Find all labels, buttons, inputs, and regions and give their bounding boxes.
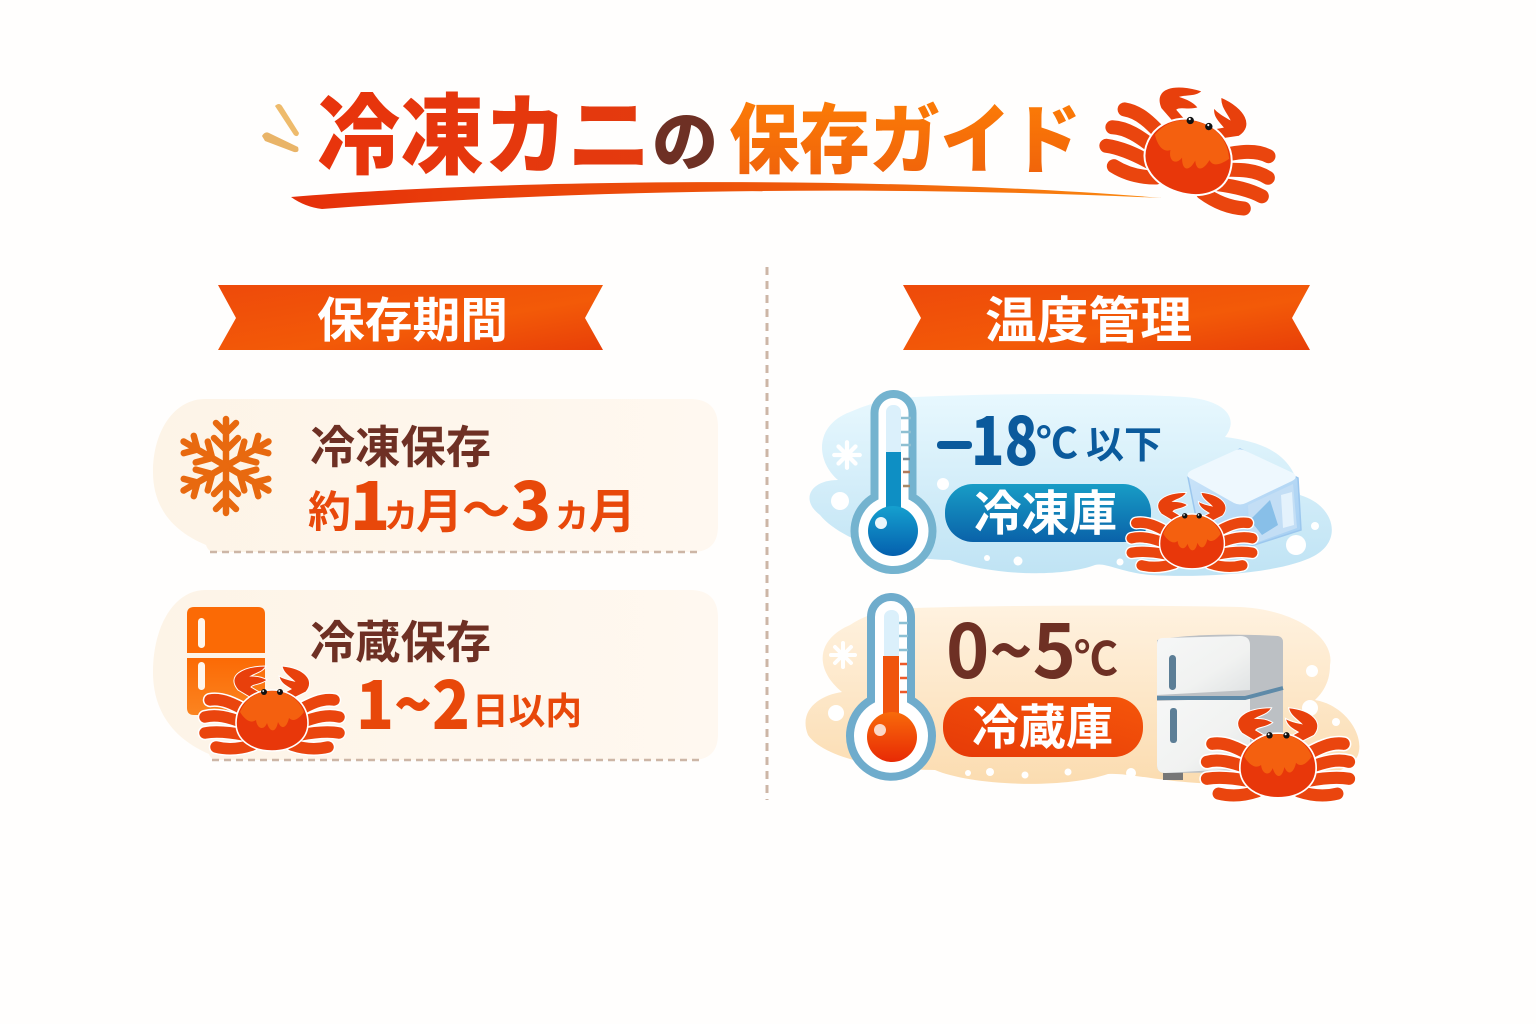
icon: refrigerator (1157, 635, 1283, 780)
card dashed edge (212, 759, 700, 761)
background snow (828, 643, 1340, 778)
value: about 1 to 3 months: ～ (462, 471, 510, 541)
temperature: 0~5℃: ℃ (1074, 623, 1118, 689)
card dashed edge (210, 551, 700, 553)
title group (262, 66, 1287, 217)
panel: refrigerator temperature (806, 593, 1359, 798)
divider (766, 267, 768, 800)
ribbon heading: 温度管理: 温度管理 (985, 281, 1192, 353)
value: about 1 to 3 months: カ (384, 489, 418, 538)
icon: crab (205, 666, 339, 751)
background snow (831, 442, 1319, 566)
icon: crab (1132, 492, 1252, 569)
title: 冷凍カニ: 冷凍カニ (317, 66, 651, 193)
thermometer: red (850, 597, 932, 777)
icon: sparkle strokes (262, 104, 299, 152)
title underline swoosh (291, 182, 1162, 209)
value: about 1 to 3 months: 約 (308, 478, 351, 540)
value: about 1 to 3 months (308, 454, 636, 550)
thermometer: blue (854, 394, 932, 570)
panel: refrigerated storage (153, 590, 718, 760)
pill: 冷凍庫: 冷凍庫 (974, 474, 1117, 544)
icon: snowflake (178, 419, 274, 513)
icon: ice cube (1188, 449, 1301, 548)
icon: orange refrigerator (187, 607, 265, 715)
temperature: -18℃以下: 18 (971, 389, 1038, 485)
icon: crab (1207, 708, 1349, 798)
card background (153, 399, 718, 552)
value: about 1 to 3 months: 月 (589, 473, 636, 542)
temperature: -18℃以下: ℃ (1036, 410, 1078, 471)
value: about 1 to 3 months: カ (555, 489, 589, 538)
value: 1 to 2 days (356, 653, 582, 749)
card background (153, 590, 718, 760)
title: の: の (652, 89, 718, 185)
pill: 冷凍庫 (945, 474, 1151, 544)
value: about 1 to 3 months: 3 (511, 454, 551, 550)
value: 1 to 2 days: 1~2 (356, 653, 470, 749)
ribbon heading: 温度管理 (903, 281, 1310, 353)
value: 1 to 2 days: 日以内 (472, 681, 582, 735)
value: about 1 to 3 months: 1 (350, 454, 390, 550)
ribbon heading: 保存期間: 保存期間 (317, 281, 508, 351)
pill: 冷蔵庫: 冷蔵庫 (972, 688, 1113, 758)
title: 保存ガイド: 保存ガイド (729, 79, 1081, 189)
temperature: -18℃以下: 以下 (1086, 414, 1162, 469)
icon: title crab (1100, 68, 1287, 217)
temperature: -18℃以下 (937, 389, 1162, 485)
ribbon heading: 保存期間 (218, 281, 603, 351)
panel: frozen storage (153, 399, 718, 552)
temperature: 0~5℃: 0~5 (946, 593, 1076, 700)
orange cloud background (806, 606, 1359, 784)
panel: freezer temperature (810, 389, 1332, 576)
label: 冷凍保存: 冷凍保存 (310, 411, 491, 476)
label: 冷蔵保存: 冷蔵保存 (310, 606, 491, 671)
value: about 1 to 3 months: 月 (416, 473, 463, 542)
blue cloud background (810, 394, 1332, 576)
